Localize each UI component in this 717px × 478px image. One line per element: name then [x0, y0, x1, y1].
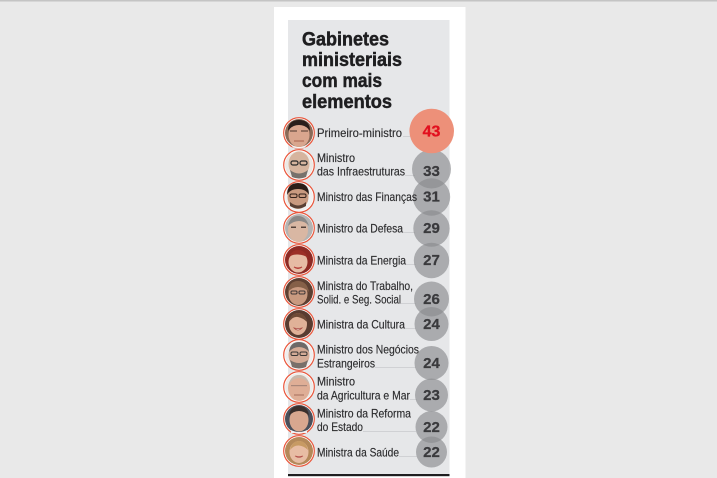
bubble: 33 [412, 150, 451, 188]
row labels: Ministra da Energia [317, 254, 406, 268]
bubble: 24 culture [414, 307, 448, 341]
row labels: Ministro [317, 151, 355, 165]
row labels: Estrangeiros [317, 356, 375, 370]
values: 29 [423, 220, 440, 237]
bubble: 43 [409, 109, 454, 153]
row labels: Ministro dos Negócios [317, 342, 419, 356]
bubble: 22 health [416, 436, 447, 468]
panel: grey card [288, 20, 450, 474]
values: 23 [423, 387, 440, 404]
bottom rule [288, 474, 450, 476]
portraits [284, 118, 314, 466]
row labels: Ministro das Finanças [317, 190, 417, 204]
row labels: Ministra do Trabalho, [317, 279, 413, 293]
title: elementos [302, 91, 392, 113]
portrait: Negócios Estrangeiros [284, 340, 314, 370]
title [302, 28, 402, 113]
row labels: Solid. e Seg. Social [317, 292, 401, 306]
portrait: Cultura [284, 309, 314, 339]
bubble: 27 [414, 243, 449, 278]
values: 26 [423, 291, 440, 308]
row labels: Ministro da Defesa [317, 222, 403, 236]
values: 24 [423, 316, 440, 333]
values: 22 [423, 419, 440, 436]
title: Gabinetes [302, 28, 389, 50]
values [423, 124, 440, 461]
row labels: do Estado [317, 420, 363, 434]
portrait: Trabalho [284, 277, 314, 307]
row labels: Ministra da Cultura [317, 318, 405, 332]
portrait: Finanças [284, 182, 314, 212]
row labels: Ministro da Reforma [317, 406, 411, 420]
values: 24 [423, 355, 440, 372]
portrait: Defesa [284, 213, 314, 243]
row labels: Primeiro-ministro [317, 126, 402, 140]
portrait: Infraestruturas [284, 150, 314, 180]
values: 31 [423, 188, 440, 206]
bubble: 24 foreign [414, 346, 448, 380]
bubble chart [409, 109, 454, 467]
values: 43 [423, 124, 440, 140]
row labels: Ministra da Saúde [317, 446, 399, 460]
row labels: das Infraestruturas [317, 164, 405, 178]
portrait: Reforma do Estado [284, 404, 314, 434]
values: 27 [423, 252, 440, 269]
bubble: 29 [413, 210, 450, 247]
values: 22 [423, 444, 440, 461]
row labels [317, 126, 419, 460]
portrait: Primeiro-ministro [284, 118, 314, 148]
title: ministeriais [302, 49, 402, 71]
portrait: Energia [284, 245, 314, 275]
title: com mais [302, 70, 382, 92]
panel: white page [274, 7, 466, 478]
bubble: 23 [415, 378, 448, 412]
portrait: Agricultura [284, 372, 314, 402]
portrait: Saúde [284, 436, 314, 466]
row labels: da Agricultura e Mar [317, 388, 410, 402]
values: 33 [423, 163, 440, 180]
row labels: Ministro [317, 374, 355, 388]
bubble: 31 [413, 178, 450, 216]
bubble: 26 [414, 282, 449, 316]
bubble: 22 reform [416, 411, 448, 443]
